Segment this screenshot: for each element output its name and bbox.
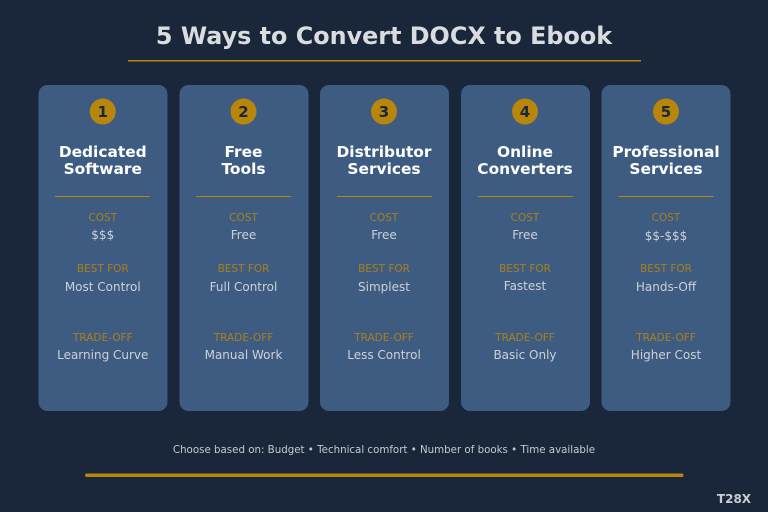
trade-off: Higher Cost	[631, 348, 701, 362]
number badge 5	[653, 98, 679, 124]
card heading: Converters	[477, 160, 573, 178]
trade-off: Learning Curve	[57, 348, 148, 362]
number badge 4: 4	[520, 103, 530, 121]
best for: BEST FOR	[77, 263, 129, 275]
trade-off: TRADE-OFF	[72, 332, 133, 344]
number badge 2: 2	[238, 103, 249, 121]
cost: COST	[370, 212, 399, 224]
title: 5 Ways to Convert DOCX to Ebook	[156, 22, 613, 50]
panel: Professional Services	[602, 85, 730, 411]
cost: $$-$$$	[645, 229, 687, 243]
best for: BEST FOR	[358, 263, 410, 275]
panel: Online Converters	[461, 85, 590, 411]
trade-off	[493, 332, 557, 362]
cost: COST	[88, 212, 118, 224]
best for	[358, 263, 410, 294]
best for: BEST FOR	[499, 263, 551, 275]
best for	[210, 263, 277, 294]
trade-off: TRADE-OFF	[353, 332, 414, 344]
best for	[636, 263, 697, 294]
number badge 4	[512, 98, 538, 124]
best for	[65, 263, 141, 294]
trade-off	[205, 332, 282, 362]
number badge 1: 1	[98, 103, 108, 121]
number badge 5: 5	[661, 103, 671, 121]
trade-off: Less Control	[347, 348, 421, 362]
panel: Free Tools	[180, 85, 308, 411]
best for: Most Control	[65, 280, 141, 294]
trade-off	[347, 332, 421, 362]
cost: COST	[229, 212, 258, 224]
card heading: Software	[64, 160, 142, 178]
trade-off	[57, 332, 148, 362]
card heading: Services	[347, 160, 421, 178]
cost: Free	[512, 228, 538, 242]
number badge 1	[90, 98, 116, 124]
watermark: T28X	[717, 492, 752, 506]
cost: $$$	[91, 228, 114, 242]
footer note: Choose based on: Budget • Technical comfort • Number of books • Time available	[173, 444, 595, 456]
best for: Full Control	[210, 280, 277, 294]
best for: Fastest	[504, 279, 547, 293]
card heading: Free	[224, 143, 262, 161]
trade-off: TRADE-OFF	[494, 332, 555, 344]
cost	[511, 212, 540, 242]
trade-off	[631, 332, 701, 362]
cost: COST	[652, 212, 681, 224]
number badge 2	[230, 98, 256, 124]
footer accent bar	[85, 474, 684, 477]
trade-off: TRADE-OFF	[635, 332, 696, 344]
cost: Free	[231, 228, 256, 242]
card heading: Tools	[221, 160, 266, 178]
card heading: Online	[497, 143, 553, 161]
cost	[88, 212, 118, 242]
trade-off: TRADE-OFF	[213, 332, 273, 344]
trade-off: Basic Only	[493, 348, 557, 362]
cost: Free	[371, 228, 397, 242]
best for: BEST FOR	[640, 263, 692, 275]
cost	[229, 212, 258, 242]
best for: Hands-Off	[636, 280, 697, 294]
card heading: Professional	[612, 143, 720, 161]
number badge 3: 3	[379, 103, 389, 121]
best for	[499, 263, 551, 293]
cost	[370, 212, 399, 242]
panel: Dedicated Software	[38, 85, 168, 411]
card heading: Dedicated	[59, 143, 147, 161]
best for: BEST FOR	[218, 263, 269, 275]
best for: Simplest	[358, 280, 410, 294]
number badge 3	[371, 98, 397, 124]
cost: COST	[511, 212, 540, 224]
trade-off: Manual Work	[205, 348, 282, 362]
panel: Distributor Services	[320, 85, 449, 411]
cost	[645, 212, 687, 243]
card heading: Distributor	[337, 143, 432, 161]
card heading: Services	[629, 160, 703, 178]
